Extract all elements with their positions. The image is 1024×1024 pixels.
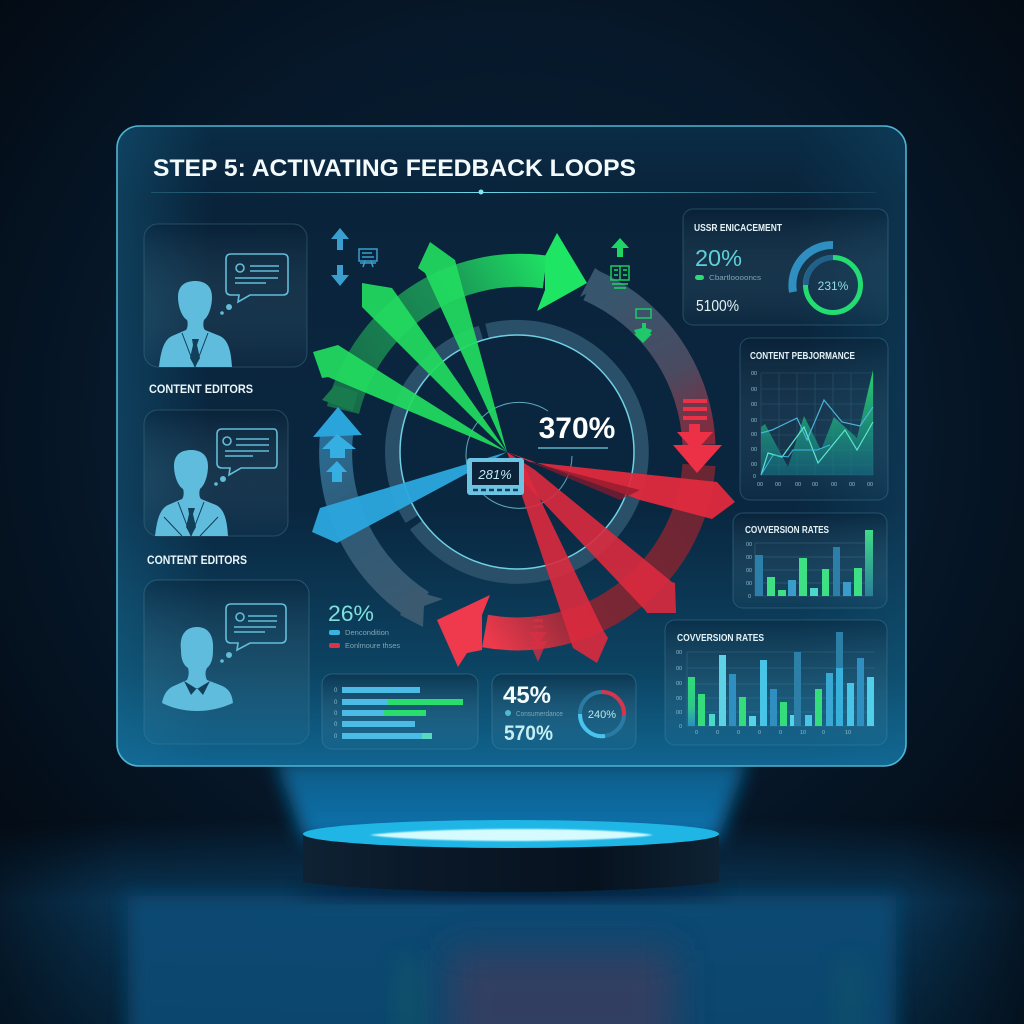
- line chart: 00: [831, 482, 837, 488]
- panel: horizontal bars: 0: [334, 688, 338, 694]
- panel: conversion rates small: [733, 513, 887, 608]
- icon: red stacked down arrows: [673, 399, 722, 473]
- bar chart large: 00: [676, 710, 682, 716]
- panel: user engagement: 5100%: [696, 298, 739, 315]
- stat: 26% with legend: 26%: [328, 601, 374, 626]
- panel: bottom stats: Consumerdance: [516, 709, 563, 718]
- line chart: 00: [751, 432, 757, 438]
- title divider: [151, 190, 876, 194]
- stat: 26% with legend: [328, 601, 400, 650]
- line chart: 00: [751, 371, 757, 377]
- icon: speech bubble 1: [220, 254, 288, 315]
- bar chart large: 10: [845, 730, 851, 736]
- line chart: 0: [753, 474, 756, 480]
- card: content editor 2: [144, 410, 288, 536]
- line chart: 00: [751, 387, 757, 393]
- line chart: 00: [751, 447, 757, 453]
- panel: conversion rates small: COVVERSION RATES: [745, 525, 829, 536]
- line chart: 00: [812, 482, 818, 488]
- bar chart large: 0: [779, 730, 782, 736]
- icon: person 2: [155, 450, 228, 536]
- line chart: 00: [751, 418, 757, 424]
- bar chart large: [676, 632, 875, 736]
- cycle arc: green top: [322, 233, 587, 411]
- bar chart large: 00: [676, 666, 682, 672]
- panel: horizontal bars: 0: [334, 734, 338, 740]
- center value: 370%: [539, 412, 615, 445]
- cycle arc: slate left: [336, 430, 443, 627]
- bar chart small: [746, 530, 873, 600]
- donut: 231%: [792, 245, 860, 312]
- panel: content performance: [740, 338, 888, 500]
- icon: speech bubble 3: [220, 604, 286, 663]
- panel: horizontal bars: 0: [334, 700, 338, 706]
- bar chart large: 0: [695, 730, 698, 736]
- bar chart small: 00: [746, 555, 752, 561]
- platform: [296, 820, 726, 897]
- icon: person 3: [162, 627, 233, 711]
- light beam: [275, 760, 748, 840]
- panel: horizontal bars: 0: [334, 711, 338, 717]
- card: content editor 3: [144, 580, 309, 744]
- icon: faint red down arrows: [529, 619, 547, 662]
- line chart: 00: [751, 402, 757, 408]
- line chart: 00: [795, 482, 801, 488]
- floor reflection: [128, 896, 896, 1024]
- icon: speech bubble 2: [214, 429, 277, 486]
- bar chart small: 00: [746, 568, 752, 574]
- center monitor icon: 281%: [477, 467, 512, 482]
- bar chart large: 00: [676, 650, 682, 656]
- inner ring: [393, 327, 641, 576]
- icon: blue stacked up arrows: [313, 407, 362, 482]
- line chart: 00: [757, 482, 763, 488]
- line chart: [751, 370, 873, 488]
- panel: user engagement: 20%: [695, 245, 742, 271]
- bar chart large: 0: [737, 730, 740, 736]
- stat: 26% with legend: Dencondition: [345, 628, 389, 637]
- icon: person 1: [159, 281, 232, 367]
- fan arrows: green: [313, 242, 507, 452]
- donut: 231%: 231%: [818, 279, 849, 293]
- panel: user engagement: USSR ENICACEMENT: [694, 223, 782, 234]
- cycle arc: slate to red right: [580, 268, 699, 445]
- line chart: 00: [775, 482, 781, 488]
- bar chart large: 0: [822, 730, 825, 736]
- bar chart large: 00: [676, 681, 682, 687]
- panel: user engagement: [683, 209, 888, 325]
- bar chart large: 0: [716, 730, 719, 736]
- panel: conversion rates large: COVVERSION RATES: [677, 633, 764, 644]
- icon: green up arrow: [611, 238, 629, 257]
- line chart: 00: [867, 482, 873, 488]
- bar chart large: 0: [758, 730, 761, 736]
- icon: green small screen and tree: [634, 309, 652, 343]
- bar chart large: 10: [800, 730, 806, 736]
- icon: blue up and down arrows: [331, 228, 349, 286]
- panel: content performance: CONTENT PEBJORMANCE: [750, 351, 855, 362]
- panel: conversion rates large: [665, 620, 887, 745]
- cycle arc: dark red to bright red bottom: [437, 465, 699, 667]
- icon: green circuit: [611, 266, 629, 288]
- bar chart small: 0: [748, 594, 751, 600]
- stat: 26% with legend: Eonlmoure thses: [345, 641, 400, 650]
- fan arrows: red: [507, 452, 735, 663]
- line chart: 00: [751, 462, 757, 468]
- bar chart small: 00: [746, 542, 752, 548]
- panel: user engagement: Cbartlooooncs: [709, 273, 761, 282]
- panel: horizontal bars: [322, 674, 478, 749]
- bar chart large: 00: [676, 696, 682, 702]
- main glass panel: [117, 126, 906, 766]
- panel: bottom stats: 45%: [503, 682, 551, 709]
- donut: 240%: 240%: [588, 709, 616, 721]
- label: content editors 1: CONTENT EDITORS: [149, 382, 253, 396]
- title: STEP 5: ACTIVATING FEEDBACK LOOPS: [153, 155, 636, 182]
- panel: bottom stats: [492, 674, 636, 749]
- line chart: 00: [849, 482, 855, 488]
- label: content editors 2: CONTENT EDITORS: [147, 553, 247, 567]
- fan arrow: blue: [312, 452, 507, 543]
- card: content editor 1: [144, 224, 307, 367]
- panel: bottom stats: 570%: [504, 722, 553, 745]
- panel: horizontal bars: 0: [334, 722, 338, 728]
- donut: 240%: [580, 692, 624, 736]
- bar chart large: 0: [679, 724, 682, 730]
- icon: small presentation screen: [359, 249, 377, 267]
- center monitor icon: [467, 458, 524, 495]
- bar chart small: 00: [746, 581, 752, 587]
